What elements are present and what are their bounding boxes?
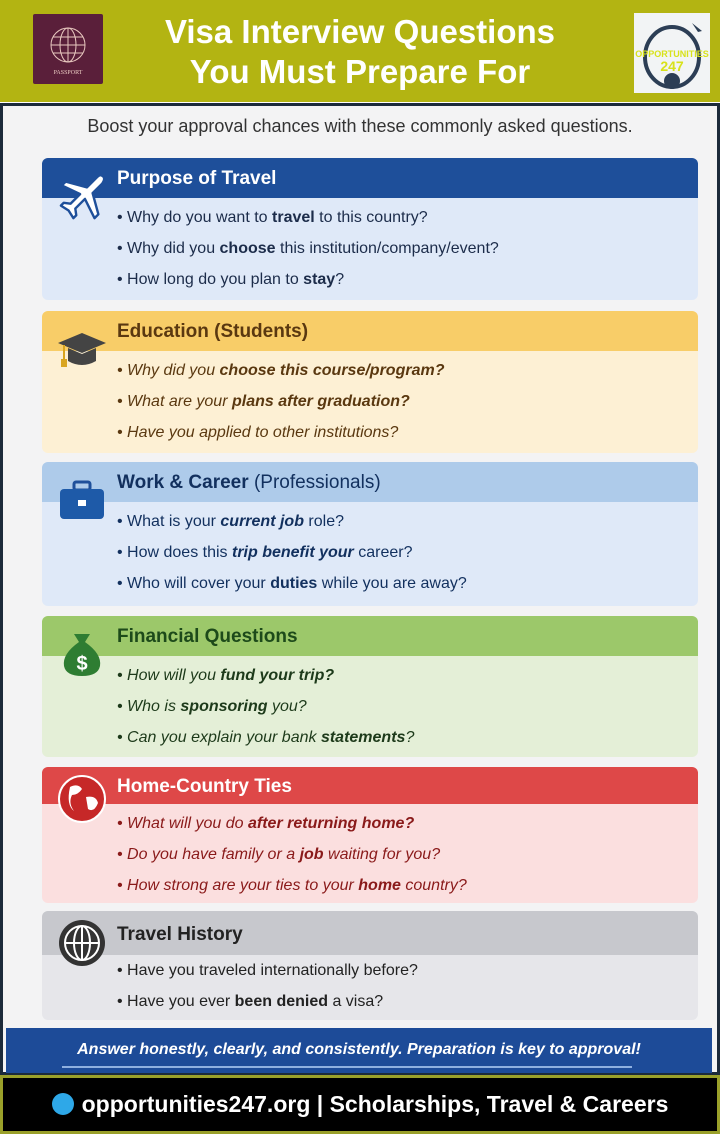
panel: purpose of travel: • Why do you want to travel to this country? bbox=[117, 209, 428, 226]
panel: work & career: • What is your current job role? bbox=[117, 513, 344, 530]
panel: financial: • Can you explain your bank statements? bbox=[117, 729, 414, 746]
panel: purpose of travel: • Why did you choose this institution/company/event? bbox=[117, 240, 499, 257]
title: Visa Interview Questions bbox=[165, 13, 555, 50]
icon: globe footer bbox=[52, 1093, 74, 1115]
header banner bbox=[0, 0, 720, 102]
icon: logo: 247 bbox=[660, 58, 684, 74]
icon: airplane bbox=[60, 176, 103, 220]
panel: home-country ties: • What will you do after returning home? bbox=[117, 815, 414, 832]
panel: financial: • Who is sponsoring you? bbox=[117, 698, 307, 715]
icon: passport: PASSPORT bbox=[54, 70, 83, 76]
panel: education: • Why did you choose this course/program? bbox=[117, 362, 444, 379]
icon: globe bbox=[59, 920, 105, 966]
panel: financial: Financial Questions bbox=[117, 626, 298, 647]
title bbox=[165, 13, 555, 90]
bottom note band bbox=[6, 1028, 712, 1073]
panel: travel history: Travel History bbox=[117, 924, 243, 945]
panel: purpose of travel: • How long do you plan to stay? bbox=[117, 271, 344, 288]
icon: money bag bbox=[64, 634, 100, 676]
footer bbox=[0, 1075, 720, 1134]
panel: education: • Have you applied to other institutions? bbox=[117, 424, 398, 441]
panel: education: Education (Students) bbox=[117, 321, 308, 342]
panel: home-country ties: • How strong are your ties to your home country? bbox=[117, 877, 467, 894]
subtitle: Boost your approval chances with these commonly asked questions. bbox=[87, 116, 633, 136]
icon: logo bbox=[634, 13, 710, 93]
icon: logo: OPPORTUNITIES bbox=[635, 49, 709, 59]
bottom note band: Answer honestly, clearly, and consistently. Preparation is key to approval! bbox=[77, 1041, 641, 1058]
title: You Must Prepare For bbox=[190, 53, 530, 90]
icon: money bag: $ bbox=[76, 653, 88, 675]
panel: travel history: • Have you ever been denied a visa? bbox=[117, 993, 383, 1010]
panel: work & career: • Who will cover your duties while you are away? bbox=[117, 575, 467, 592]
panel: education: • What are your plans after graduation? bbox=[117, 393, 410, 410]
icon: graduation cap bbox=[58, 333, 106, 367]
panel: home-country ties bbox=[42, 767, 698, 903]
panel: work & career bbox=[42, 462, 698, 606]
panel: work & career: • How does this trip benefit your career? bbox=[117, 544, 412, 561]
panel: financial bbox=[42, 616, 698, 757]
panel: travel history bbox=[42, 911, 698, 1020]
panel: purpose of travel bbox=[42, 158, 698, 300]
panel: purpose of travel: Purpose of Travel bbox=[117, 168, 276, 189]
panel: travel history: • Have you traveled internationally before? bbox=[117, 962, 418, 979]
panel: home-country ties: Home-Country Ties bbox=[117, 776, 292, 797]
panel: financial: • How will you fund your trip? bbox=[117, 667, 334, 684]
icon: globe red bbox=[58, 775, 106, 823]
panel: education bbox=[42, 311, 698, 453]
footer: opportunities247.org | Scholarships, Travel & Careers bbox=[82, 1091, 668, 1117]
panel: work & career: Work & Career (Professionals) bbox=[117, 472, 381, 493]
icon: passport bbox=[33, 14, 103, 84]
icon: briefcase bbox=[60, 480, 104, 519]
panel: home-country ties: • Do you have family or a job waiting for you? bbox=[117, 846, 440, 863]
